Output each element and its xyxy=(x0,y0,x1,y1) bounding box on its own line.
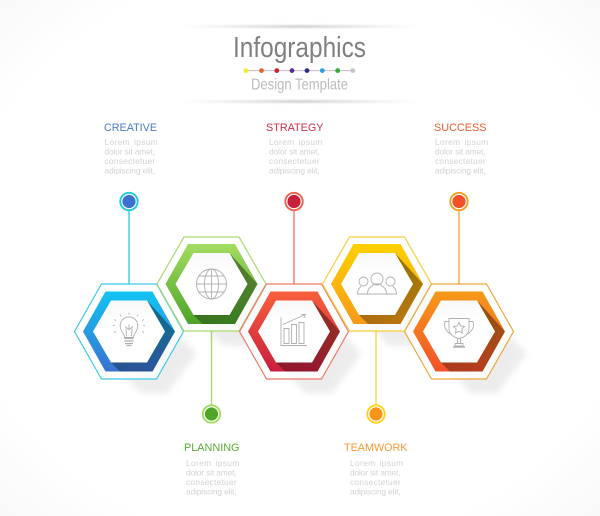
text: teamwork: consectetuer xyxy=(350,477,401,487)
title: Infographics xyxy=(233,32,366,64)
text: planning xyxy=(184,442,240,496)
text: creative: dolor sit amet, xyxy=(104,146,156,156)
hexagon: teamwork xyxy=(322,237,445,346)
icon: team xyxy=(358,273,396,294)
text: teamwork: adipiscing elit, xyxy=(350,486,401,496)
subtitle dots xyxy=(244,68,355,73)
text: success: dolor sit amet, xyxy=(435,146,486,156)
text: creative: ipsum xyxy=(134,137,158,147)
text: creative: CREATIVE xyxy=(104,122,157,134)
icon: light bulb xyxy=(113,312,145,346)
text: strategy xyxy=(266,122,324,176)
text: creative: Lorem xyxy=(104,137,130,147)
icon: bar chart xyxy=(281,314,307,346)
text: success: SUCCESS xyxy=(434,122,486,134)
text: teamwork: TEAMWORK xyxy=(344,442,408,454)
hexagon: creative xyxy=(74,284,197,394)
text: planning: Lorem xyxy=(186,458,212,468)
text: planning: PLANNING xyxy=(184,442,240,454)
text: strategy: ipsum xyxy=(298,137,323,147)
node: planning xyxy=(203,405,220,423)
text: teamwork xyxy=(344,442,408,496)
text: strategy: STRATEGY xyxy=(266,122,324,134)
text: creative: adipiscing elit, xyxy=(104,166,156,176)
text: creative xyxy=(104,122,158,176)
text: success: consectetuer xyxy=(435,156,486,166)
node: success xyxy=(450,193,468,210)
text: strategy: consectetuer xyxy=(269,156,320,166)
text: planning: adipiscing elit, xyxy=(186,486,237,496)
text: strategy: adipiscing elit, xyxy=(269,166,320,176)
icon: trophy xyxy=(444,318,474,347)
text: success: ipsum xyxy=(464,137,489,147)
subtitle: Design Template xyxy=(251,76,348,94)
connector lines xyxy=(129,209,459,406)
text: success: adipiscing elit, xyxy=(435,166,486,176)
node: creative xyxy=(120,193,138,210)
hexagon: success xyxy=(404,284,527,394)
text: strategy: dolor sit amet, xyxy=(269,146,320,156)
text: success xyxy=(434,122,489,176)
header xyxy=(185,26,415,102)
text: success: Lorem xyxy=(435,137,460,147)
text: teamwork: ipsum xyxy=(380,458,404,468)
text: creative: consectetuer xyxy=(104,156,156,166)
text: planning: consectetuer xyxy=(186,477,237,487)
text: planning: ipsum xyxy=(216,458,240,468)
hexagon: strategy xyxy=(240,284,362,394)
text: strategy: Lorem xyxy=(269,137,294,147)
text: teamwork: Lorem xyxy=(350,458,376,468)
text: teamwork: dolor sit amet, xyxy=(350,468,401,478)
hexagon: planning xyxy=(157,237,280,346)
node: strategy xyxy=(285,193,303,210)
icon: globe xyxy=(196,269,226,299)
node: teamwork xyxy=(367,405,385,423)
text: planning: dolor sit amet, xyxy=(186,468,237,478)
